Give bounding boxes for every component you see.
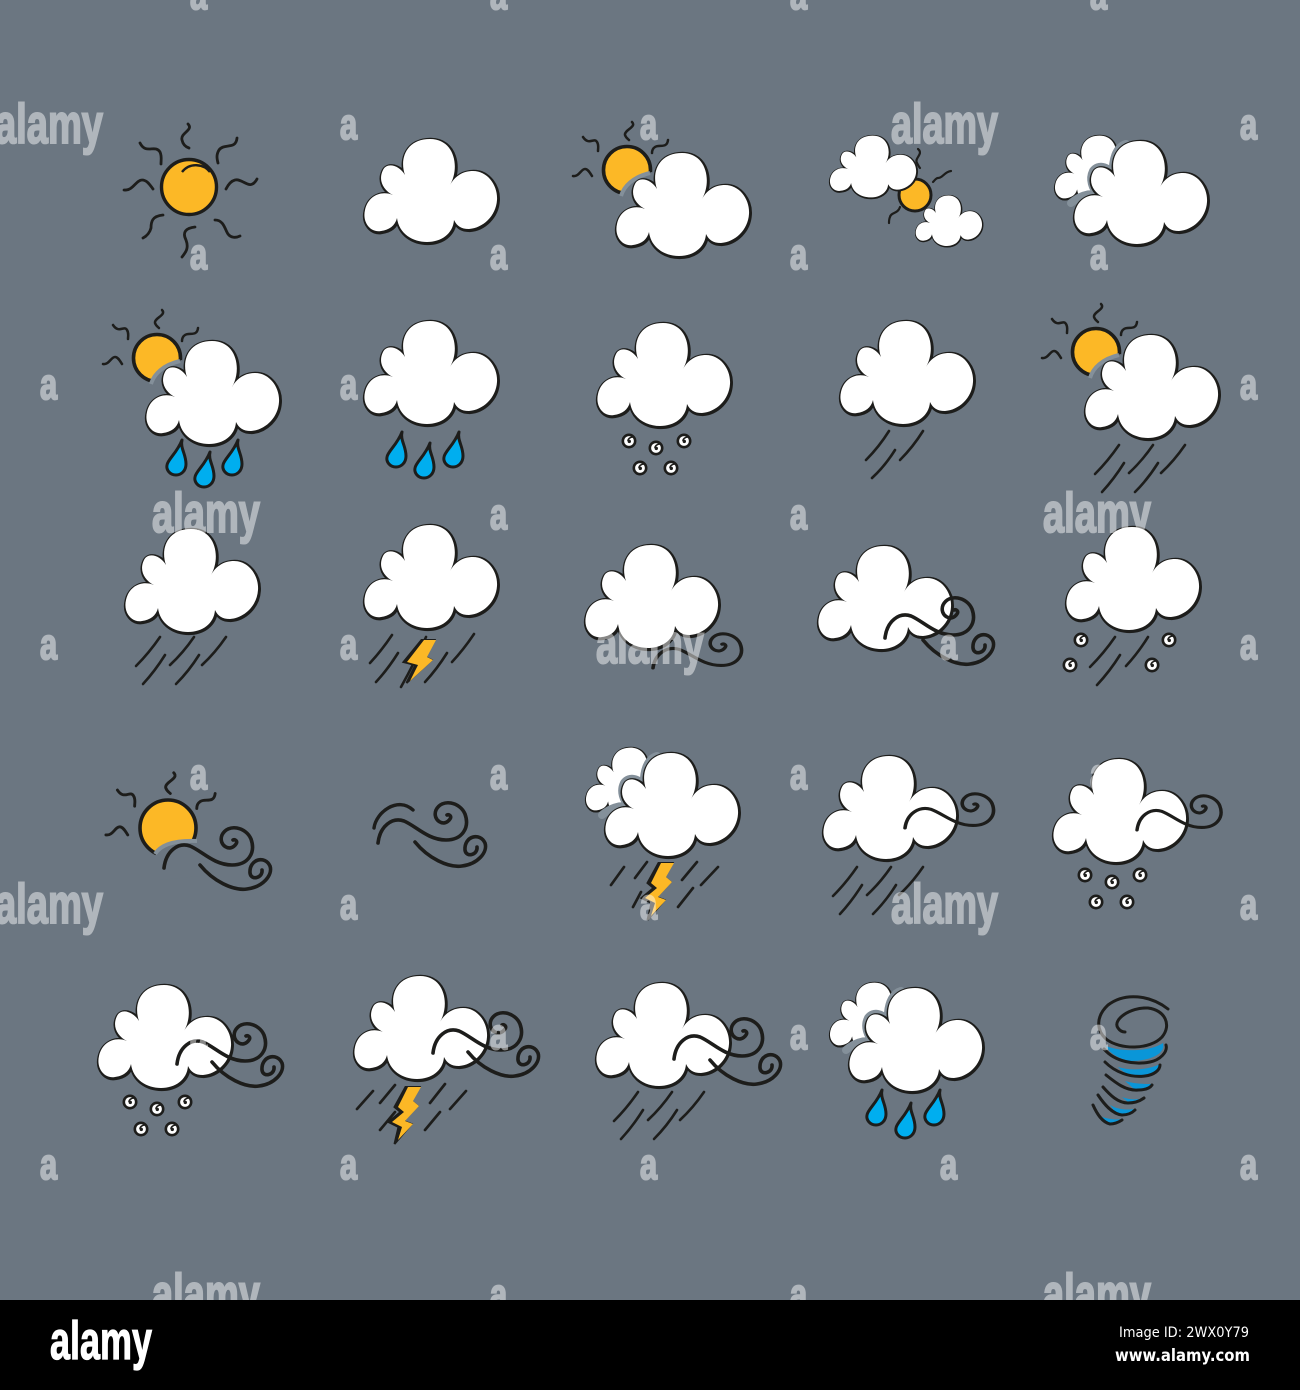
- watermarks: aaa: [340, 101, 1258, 149]
- watermarks: aaaa: [40, 621, 1258, 669]
- watermarks: alamy: [891, 872, 998, 935]
- website: www.alamy.com: [1115, 1346, 1250, 1366]
- icon: cloud with rain drops: [364, 321, 498, 478]
- icon: cloud with rain: [125, 529, 259, 684]
- image id: Image ID: 2WX0Y79: [1119, 1325, 1249, 1341]
- watermarks: aaa: [340, 881, 1258, 929]
- icon: cloud with strong wind and rain: [596, 983, 781, 1139]
- watermarks: aaaa: [190, 1011, 1108, 1059]
- icon: sun: [124, 124, 257, 257]
- icon: wind: [374, 803, 486, 866]
- icon: cloud with low wind: [585, 545, 741, 668]
- icon: cloud with light rain: [840, 321, 974, 478]
- icon: cloud with strong wind and hail: [98, 985, 283, 1135]
- watermarks: aa: [490, 491, 808, 539]
- watermarks: alamy: [1043, 1262, 1151, 1325]
- icon: cloud with wind and rain: [823, 756, 993, 914]
- icon: cloud with wind and hail: [1053, 759, 1221, 908]
- watermarks: aa: [490, 1271, 808, 1319]
- watermarks: alamy: [152, 481, 260, 544]
- icon: double cloud: [1055, 136, 1208, 245]
- icon: cloud with strong wind: [818, 546, 994, 664]
- footer logo: alamy: [50, 1311, 152, 1371]
- icon: double cloud with storm: [586, 748, 739, 920]
- icon: sun, cloud and rain drops: [103, 310, 280, 487]
- icon: tornado: [1093, 997, 1168, 1124]
- icon: sun, cloud and rain: [1042, 304, 1219, 492]
- icon: cloud with rain and hail: [1064, 527, 1200, 685]
- watermarks: aaaa: [190, 751, 1108, 799]
- icon: cloud with rain and lightning: [364, 525, 498, 687]
- footer bar: [0, 1300, 1300, 1390]
- icon: cloud: [364, 139, 498, 243]
- watermarks: alamy: [891, 92, 998, 155]
- watermarks: alamy: [596, 612, 704, 675]
- icon: sun with wind: [106, 773, 271, 889]
- watermarks: aaaaa: [40, 1141, 1258, 1189]
- icon: sun behind cloud: [573, 122, 750, 257]
- icon: cloud with strong wind and lightning: [354, 976, 539, 1144]
- icon: sun between two small clouds: [830, 136, 982, 246]
- watermarks: aaaa: [190, 231, 1108, 279]
- watermarks: alamy: [152, 1262, 260, 1325]
- icon: cloud with hail: [597, 323, 731, 474]
- watermarks: aaaaa: [40, 361, 1258, 409]
- watermarks: alamy: [1043, 481, 1151, 544]
- icon: double cloud with rain drops: [830, 983, 983, 1138]
